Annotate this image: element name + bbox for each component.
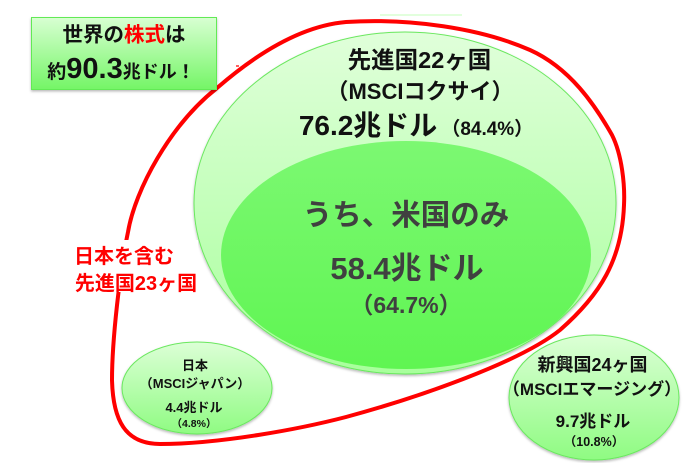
- heading: world equities: 世界の株式は: [62, 24, 186, 46]
- outline: developed 23 countries including Japan: [112, 21, 624, 444]
- label: including Japan, developed 23 countries: [74, 240, 198, 295]
- heading: US only: うち、米国のみ: [303, 199, 509, 232]
- value: 58.4 trillion dollars: 58.4兆ドル: [330, 251, 484, 286]
- panel: emerging 24 countries ellipse: 9.7兆ドル: [556, 412, 630, 431]
- panel: Japan ellipse: （4.8%）: [172, 417, 216, 430]
- panel: Japan ellipse: [122, 342, 272, 434]
- label: including Japan, developed 23 countries: 日本を含む: [74, 245, 174, 268]
- value: 90.3 trillion dollars: 約90.3兆ドル！: [47, 53, 195, 85]
- panel: Japan ellipse: 日本: [182, 358, 208, 373]
- panel: emerging 24 countries ellipse: [503, 335, 681, 460]
- panel: emerging 24 countries ellipse: （10.8%）: [564, 435, 624, 449]
- value: 76.2 trillion dollars: 76.2兆ドル（84.4%）: [299, 110, 533, 141]
- text: MSCI Kokusai: （MSCIコクサイ）: [326, 79, 514, 104]
- panel: Japan ellipse: （MSCIジャパン）: [140, 376, 250, 391]
- label: including Japan, developed 23 countries: 先進国23ヶ国: [75, 272, 197, 295]
- panel: emerging 24 countries ellipse: （MSCIエマージング）: [503, 379, 681, 399]
- heading: developed countries: 先進国22ヶ国: [348, 47, 491, 73]
- callout: total world equity market: [32, 18, 216, 90]
- panel: US only ellipse: [221, 141, 591, 369]
- panel: Japan ellipse: 4.4兆ドル: [165, 400, 223, 415]
- panel: emerging 24 countries ellipse: 新興国24ヶ国: [537, 355, 648, 375]
- value: 64.7 percent: （64.7%）: [350, 292, 462, 318]
